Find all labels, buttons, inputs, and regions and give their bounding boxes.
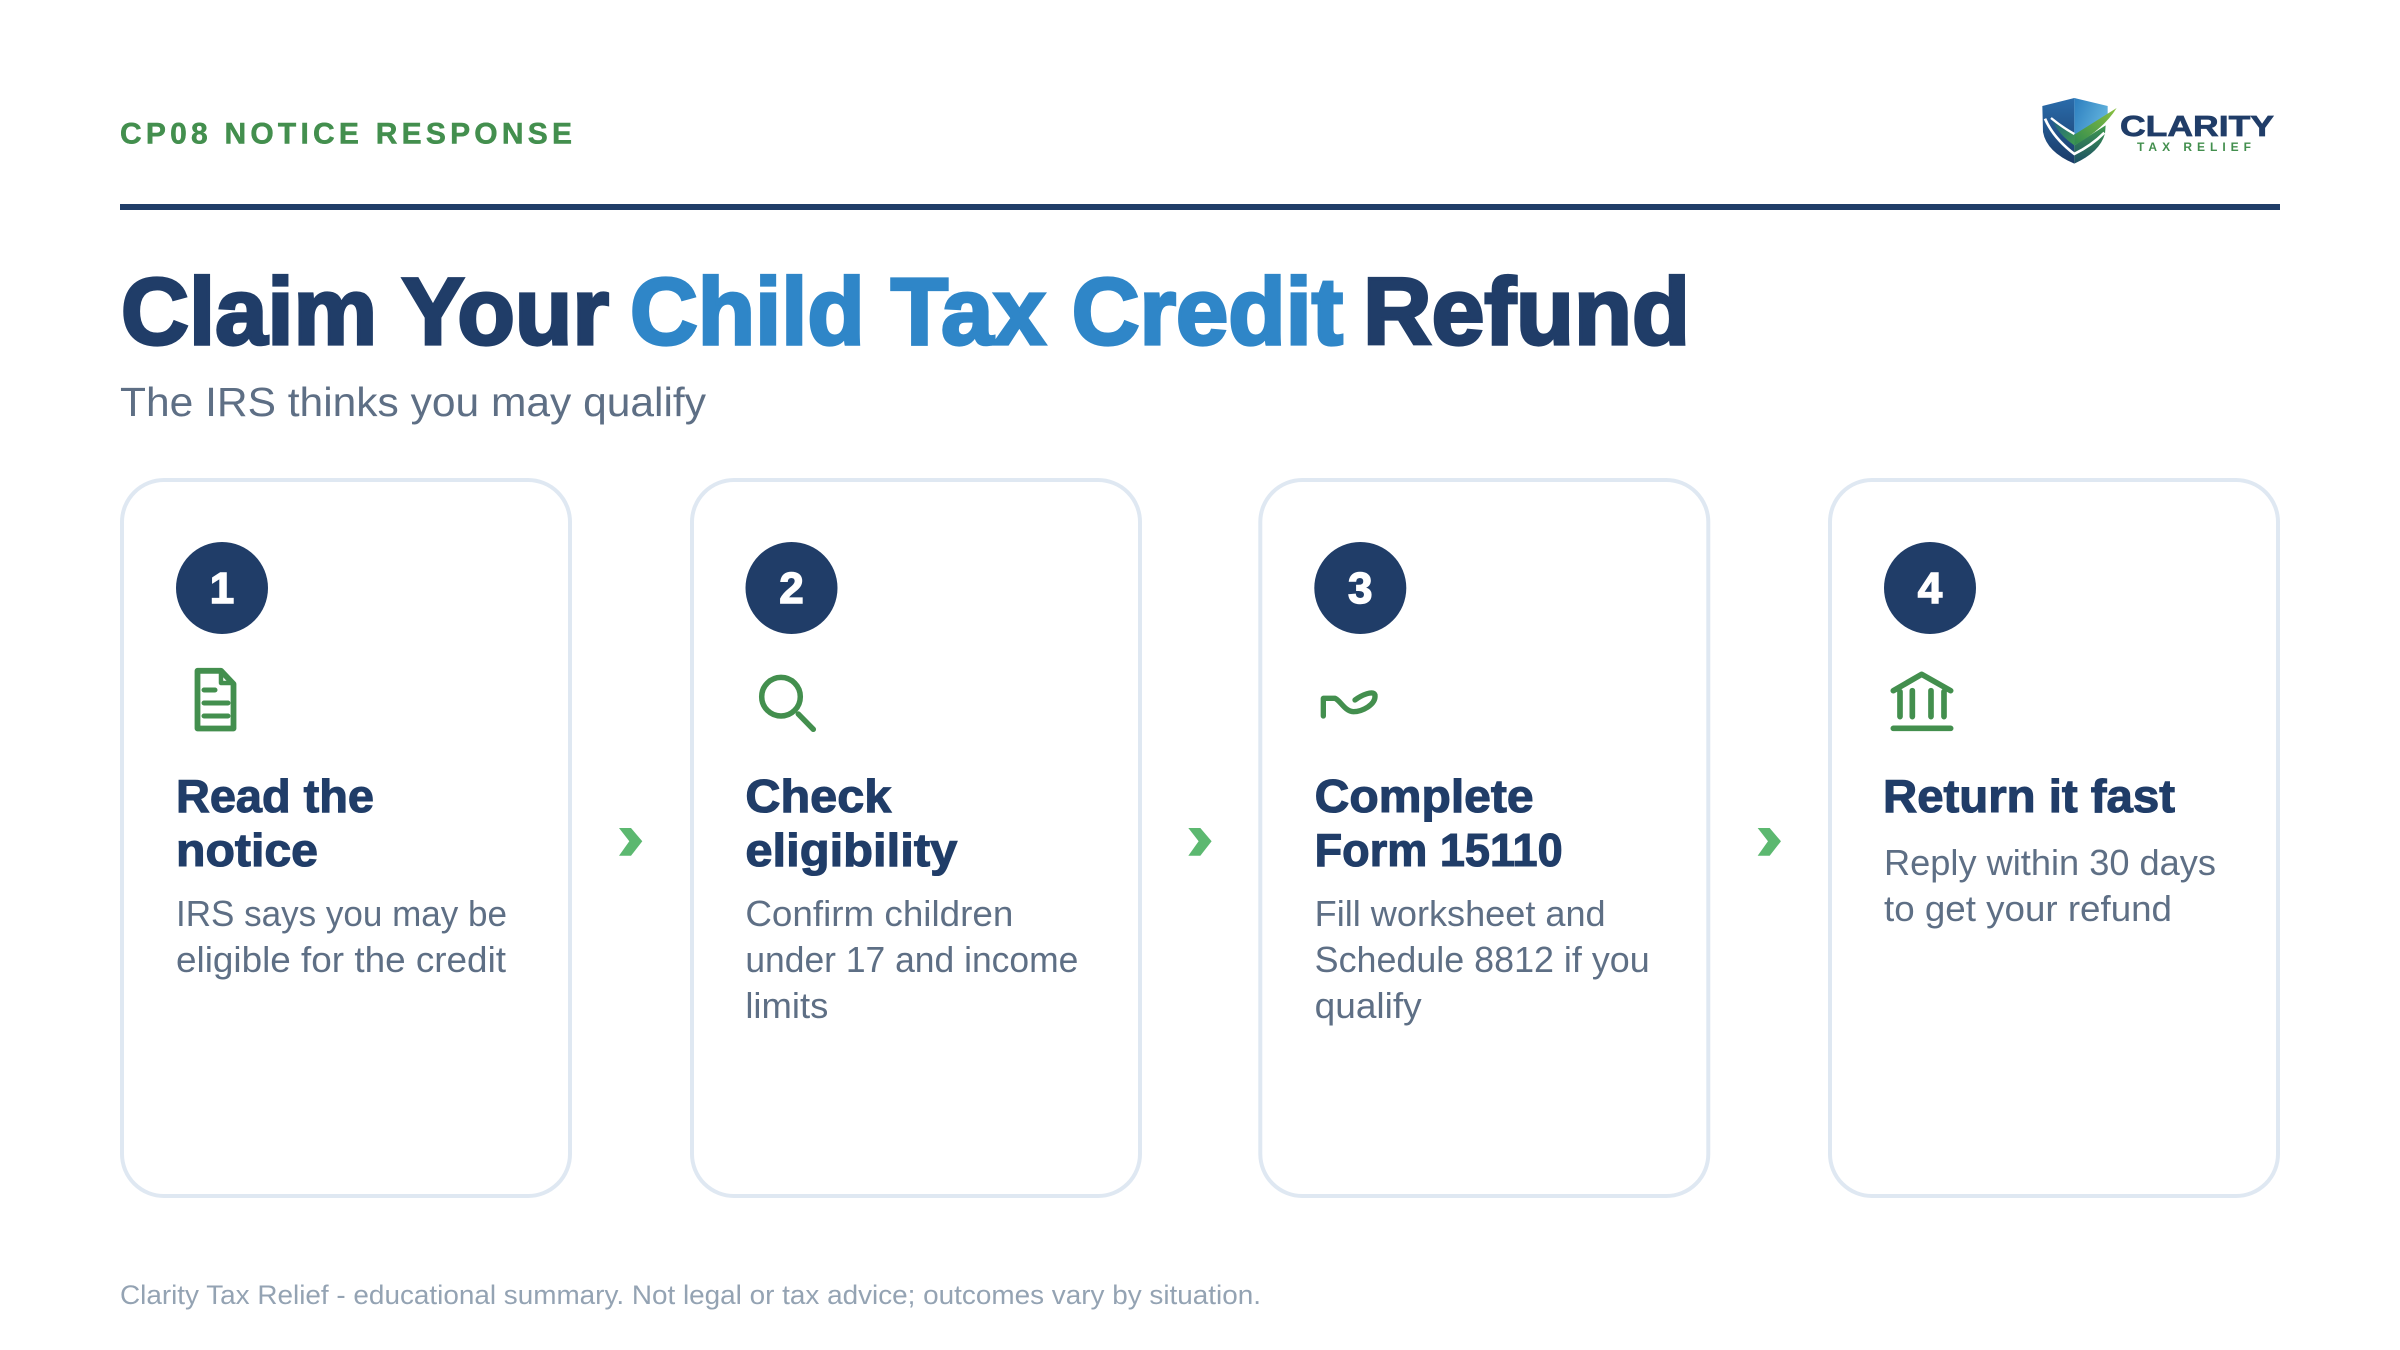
step 1 heading: Read the [176,770,374,822]
arrow 1 [619,828,642,856]
step 1 description [176,893,507,980]
icon: magnifier [762,677,813,729]
step number 4: 4 [1918,564,1943,613]
step 3 description [1315,893,1650,1026]
step 2 heading: eligibility [745,824,958,876]
title: Child Tax Credit [630,259,1343,365]
step 2 description: limits [745,985,828,1026]
step 3 heading [1315,770,1563,876]
footer disclaimer: Clarity Tax Relief - educational summary. Not legal or tax advice; outcomes vary by situation. [120,1280,1261,1310]
step 2 description: Confirm children [745,893,1013,934]
icon: shield [2042,98,2117,164]
step 3 description: Fill worksheet and [1315,893,1606,934]
title [121,259,1690,365]
step 3 description: Schedule 8812 if you [1315,939,1650,980]
step 3 heading: Form 15110 [1315,824,1563,876]
step number 2: 2 [779,564,804,613]
step 3 description: qualify [1315,985,1422,1026]
step 2 heading: Check [745,770,892,822]
subtitle: The IRS thinks you may qualify [120,379,707,425]
step number 4 [1884,542,1976,634]
logo tagline: TAX RELIEF [2137,140,2251,154]
panel: step 4 return it fast [1830,480,2278,1196]
step 4 description: to get your refund [1884,888,2172,929]
icon: document [198,671,234,728]
panel: step 2 check eligibility [692,480,1140,1196]
logo: Clarity Tax Relief [2042,98,2274,164]
step 1 heading: notice [176,824,318,876]
step 1 description: eligible for the credit [176,939,506,980]
eyebrow: CP08 notice response: CP08 NOTICE RESPONSE [120,118,572,150]
icon: bank [1893,674,1951,728]
step number 3 [1314,542,1406,634]
logo wordmark: CLARITY [2120,111,2274,143]
panel: step 1 read the notice [122,480,570,1196]
step 2 heading [745,770,958,876]
step 4 description: Reply within 30 days [1884,842,2216,883]
step 4 description [1884,842,2216,929]
step 1 description: IRS says you may be [176,893,507,934]
arrow 3 [1758,828,1781,856]
step number 1: 1 [210,564,234,613]
step 2 description [745,893,1078,1026]
step number 2 [746,542,838,634]
step 3 heading: Complete [1315,770,1534,822]
arrow 2 [1188,828,1212,856]
icon: signature [1323,693,1375,716]
step number 3: 3 [1348,564,1373,613]
title: Claim Your [121,259,609,365]
panel: step 3 complete form 15110 [1260,480,1708,1196]
step 4 heading: Return it fast [1883,770,2175,822]
step 1 heading [176,770,374,876]
step number 1 [176,542,268,634]
step 2 description: under 17 and income [745,939,1078,980]
title: Refund [1363,259,1690,365]
